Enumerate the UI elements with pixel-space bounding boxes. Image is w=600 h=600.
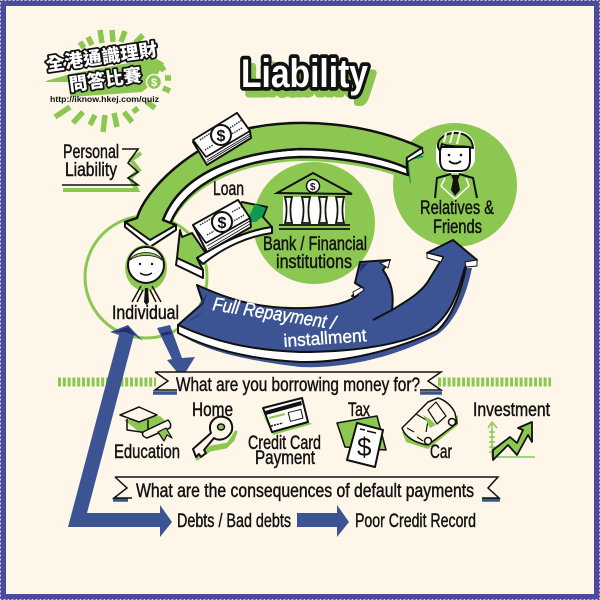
label: loan: Loan [213, 179, 244, 200]
label: debts: Debts / Bad debts [177, 511, 291, 532]
arrow: individual down to borrowing [157, 325, 195, 378]
icon: key [193, 417, 236, 459]
icon: bank building [277, 173, 352, 229]
personal liability label: Liability [65, 160, 117, 181]
icon: individual person [125, 245, 167, 305]
lower arrow head and shaft [177, 202, 272, 270]
icon: tax bill and form [337, 416, 386, 467]
white band [178, 267, 466, 362]
icon: money stack lower: $ [218, 215, 226, 232]
logo green banner [46, 58, 164, 97]
quiz logo [45, 30, 171, 132]
repayment text line 1: Full Repayment / [211, 294, 338, 335]
label: individual: Individual [112, 303, 179, 324]
circle: relatives and friends [393, 123, 517, 247]
logo Chinese title line 1: 全港通識理財 [45, 39, 158, 75]
title: Liability [246, 59, 375, 103]
title: Liability [241, 52, 369, 96]
dotted divider left [58, 378, 156, 386]
icon: investment chart [488, 422, 535, 460]
personal liability label: Personal [63, 142, 119, 163]
label: car: Car [430, 442, 452, 463]
label: credit card line 2: Payment [255, 448, 316, 469]
blue arrow underlayer [178, 268, 472, 367]
icon: money stack upper [193, 113, 251, 165]
label: investment: Investment [473, 400, 551, 421]
personal liability label [62, 142, 141, 190]
logo url: http://iknow.hkej.com/quiz [50, 94, 159, 104]
label: credit card line 1: Credit Card [248, 433, 321, 454]
icon: tax bill and form: $ [357, 432, 372, 462]
blue arrow body [178, 240, 477, 352]
icon: relatives person [435, 130, 477, 199]
label: home: Home [192, 400, 233, 421]
icon: graduation cap and diploma [120, 407, 172, 441]
icon: car [402, 398, 458, 449]
circle: individual [85, 216, 207, 338]
dotted divider right [438, 378, 551, 386]
icon: money stack upper: $ [216, 128, 226, 145]
ribbon: consequences: What are the consequences of default payments [136, 481, 474, 502]
labels in circles [112, 179, 494, 324]
label: tax: Tax [348, 400, 370, 421]
circle: bank [253, 162, 375, 284]
logo bulb icon: $ [151, 77, 157, 89]
icon: credit card [260, 398, 312, 435]
logo Chinese title line 2: 問答比賽 [68, 64, 143, 95]
arrow: debts to credit record [297, 505, 349, 537]
arrow: full repayment [178, 240, 477, 367]
label: poor credit record: Poor Credit Record [355, 511, 476, 532]
label: relatives line 1: Relatives & [420, 198, 494, 219]
logo sunburst rays [55, 30, 171, 132]
arrow: loan from relatives to individual [125, 123, 424, 247]
label: bank line 1: Bank / Financial [263, 234, 367, 255]
label: bank line 2: institutions [276, 252, 352, 273]
borrowing purposes [114, 398, 551, 469]
arrow: debts path up to individual and right [68, 325, 172, 537]
label: relatives line 2: Friends [433, 217, 482, 238]
label: education: Education [114, 442, 180, 463]
repayment text line 2: installment [283, 325, 367, 351]
icon: money stack lower [193, 200, 251, 252]
icon: bank building: $ [310, 182, 316, 193]
arrow: loan from bank to individual [176, 202, 272, 278]
ribbon: what are you borrowing: What are you borrowing money for? [176, 375, 420, 396]
